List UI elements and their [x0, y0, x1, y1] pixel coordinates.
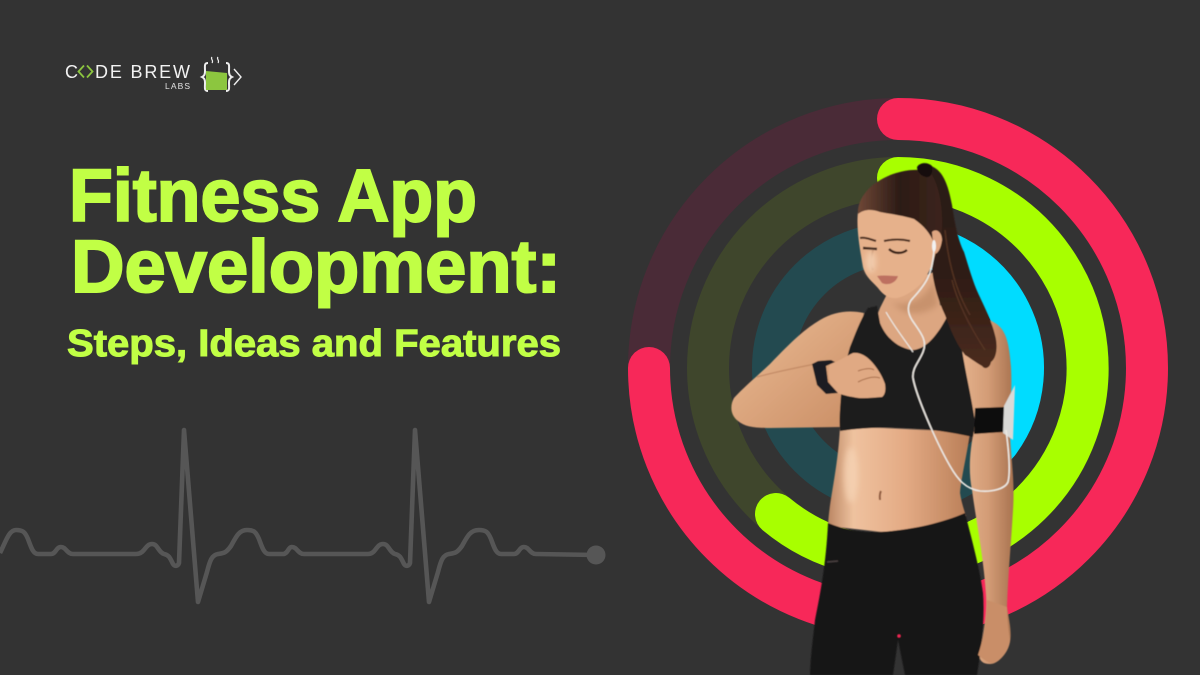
armband [974, 407, 1005, 434]
ear [932, 230, 942, 254]
earbud [932, 240, 936, 252]
woman checking smartwatch [731, 163, 1015, 675]
abs highlight [844, 447, 858, 503]
eyebrow and eye [860, 238, 910, 241]
phone [1003, 385, 1015, 440]
title [67, 154, 561, 365]
logo: Code Brew Labs: DE BREW [95, 62, 190, 82]
green ring [776, 178, 1088, 558]
pink ring [649, 119, 1147, 617]
fist [829, 353, 885, 398]
cheek highlight [866, 251, 876, 273]
navel [880, 491, 881, 500]
nose shadow [871, 250, 873, 270]
logo: Code Brew Labs: C [65, 62, 78, 82]
hand [978, 600, 1010, 663]
logo: Code Brew Labs: LABS [165, 81, 190, 91]
logo: Code Brew Labs [65, 57, 241, 91]
black crop top [840, 306, 975, 437]
right arm and back [950, 313, 1014, 664]
lips [877, 276, 898, 284]
left arm [731, 311, 864, 428]
activity rings [649, 119, 1147, 617]
torso [828, 426, 970, 534]
subtitle: Steps, Ideas and Features [67, 323, 561, 365]
title: Fitness App [69, 154, 477, 237]
smartwatch [812, 360, 838, 394]
cyan ring [898, 243, 1023, 443]
heartbeat line [0, 430, 606, 602]
neck and chest [870, 272, 962, 400]
icon: coffee cup in braces [202, 57, 241, 91]
earphone wire [908, 248, 1009, 491]
ponytail [927, 165, 997, 368]
ponytail strands [945, 230, 985, 350]
face [857, 195, 937, 298]
pants [810, 513, 984, 675]
ring tracks (faded) [649, 119, 1147, 617]
title: Development: [71, 225, 561, 308]
neck shadow [892, 280, 938, 313]
hair bun [917, 163, 932, 177]
hair cap [858, 170, 942, 245]
pink speck between legs [898, 634, 900, 638]
